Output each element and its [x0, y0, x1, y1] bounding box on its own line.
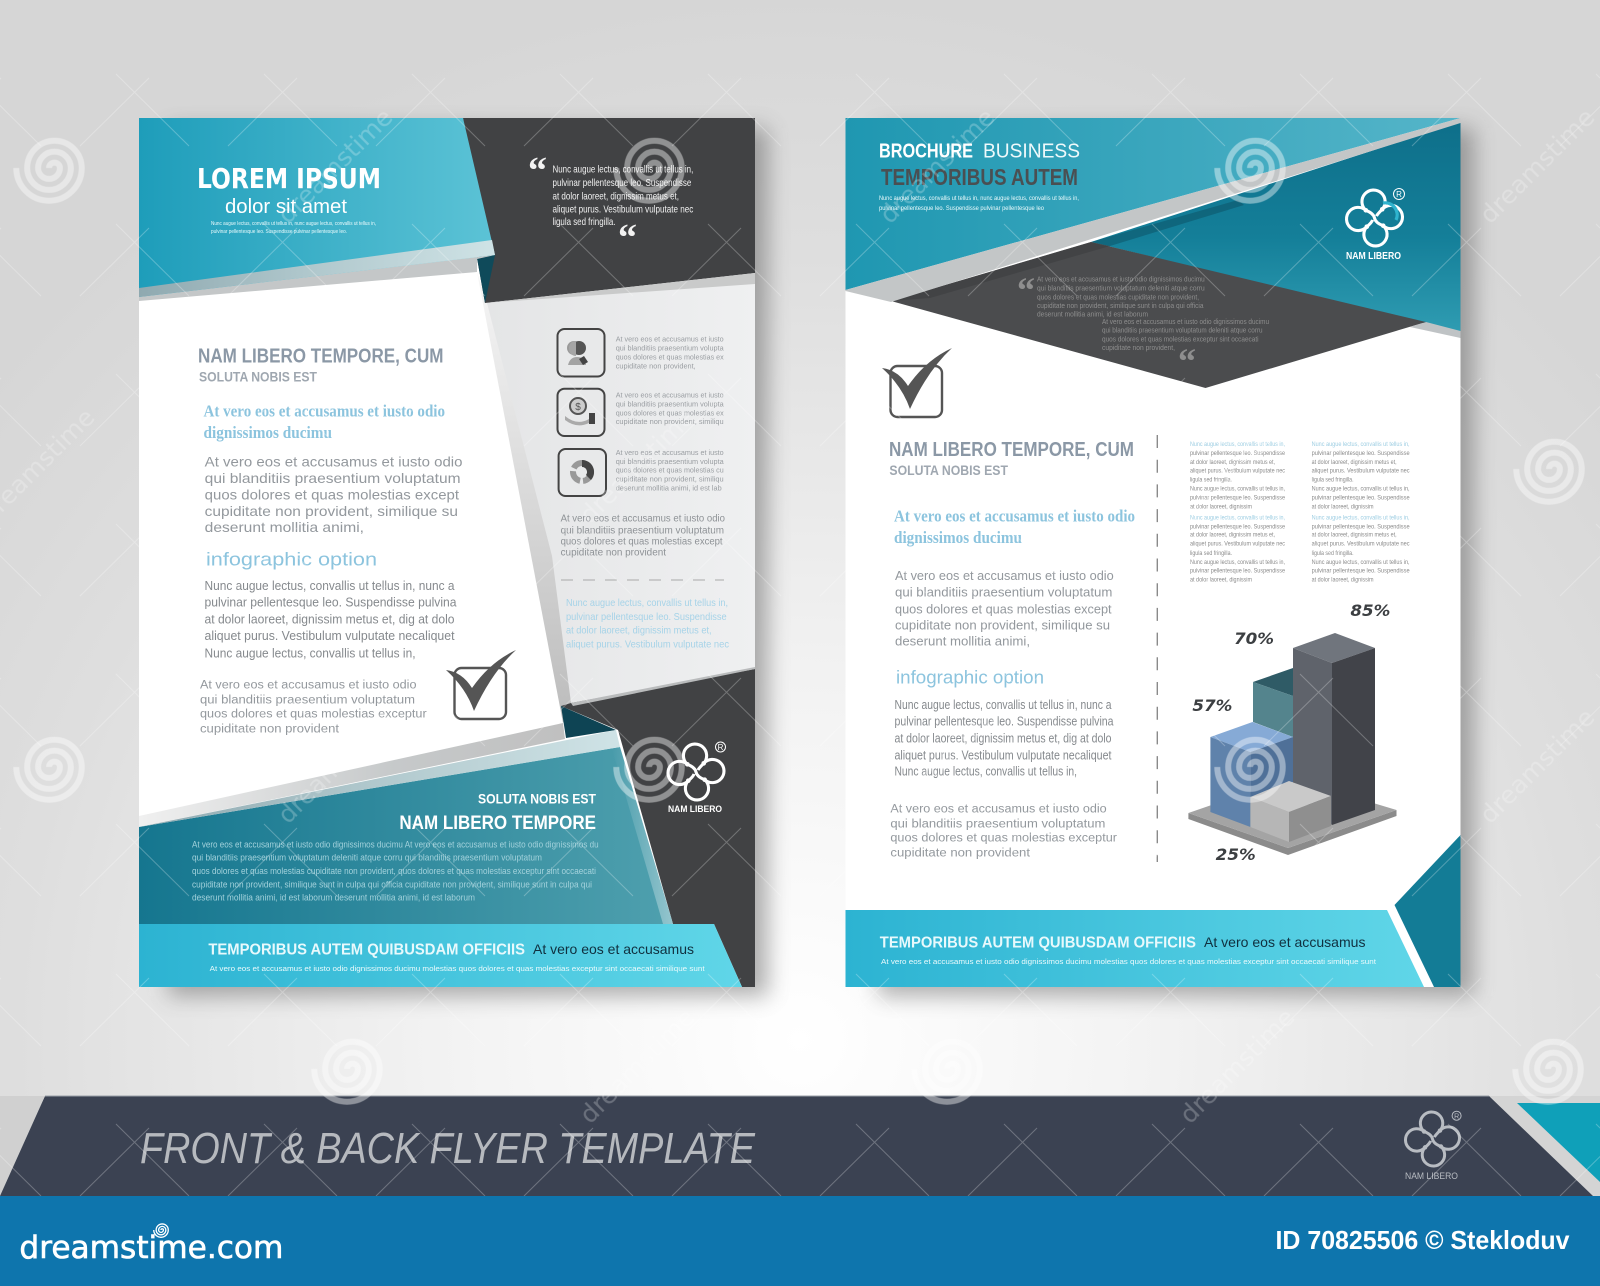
title — [879, 140, 1080, 190]
text column 2: ligula sed fringilla. — [1312, 550, 1354, 557]
text column 1: at dolor laoreet, dignissim — [1190, 503, 1252, 510]
text column 2: at dolor laoreet, dignissim metus et, — [1312, 532, 1397, 539]
panel: dark top block — [463, 118, 755, 303]
body text: deserunt mollitia animi, — [895, 634, 1030, 649]
body text 2: pulvinar pellentesque leo. Suspendisse pulvina — [204, 595, 457, 610]
panel: teal block — [139, 730, 673, 924]
body text 3: At vero eos et accusamus et iusto odio — [890, 804, 1107, 816]
chart labels: 70% — [1234, 629, 1274, 648]
blue column paragraph: aliquet purus. Vestibulum vulputate nec — [566, 639, 729, 650]
banner: bottom strip — [0, 1096, 1600, 1196]
quote block: qui blanditiis praesentium voluptatum deleniti atque corru — [1102, 326, 1263, 335]
text column 2: pulvinar pellentesque leo. Suspendisse — [1312, 494, 1410, 501]
icon: small spiral — [154, 1224, 168, 1237]
banner logo: R — [1454, 1114, 1459, 1120]
text column 1: Nunc augue lectus, convallis ut tellus in, — [1190, 514, 1285, 521]
blue serif heading: dignissimos ducimu — [204, 423, 332, 442]
panel: dark bottom block — [561, 669, 755, 987]
corner teal triangle — [1394, 835, 1460, 987]
icon: checkbox — [446, 650, 516, 719]
watermark text: dreamstime — [874, 703, 1000, 829]
body text: At vero eos et accusamus et iusto odio — [895, 568, 1114, 583]
heading: SOLUTA NOBIS EST — [199, 369, 317, 385]
quote block: At vero eos et accusamus et iusto odio dignissimos ducimu — [1102, 317, 1269, 326]
body text 2: pulvinar pellentesque leo. Suspendisse pulvina — [894, 715, 1114, 729]
text column 2: pulvinar pellentesque leo. Suspendisse — [1312, 450, 1410, 457]
text column 1: Nunc augue lectus, convallis ut tellus in, — [1190, 559, 1285, 566]
quote block: aliquet purus. Vestibulum vulputate nec — [552, 204, 693, 216]
icon descriptions: qui blanditiis praesentium volupta — [616, 344, 724, 353]
icon descriptions: At vero eos et accusamus et iusto — [616, 391, 724, 400]
text column 2: at dolor laoreet, dignissim — [1312, 577, 1374, 584]
panel: teal header — [139, 118, 495, 301]
watermark text: dreamstime — [272, 703, 398, 829]
body text 3: cupiditate non provident — [890, 848, 1031, 860]
panel: dark quote block — [891, 242, 1426, 388]
body text 2: Nunc augue lectus, convallis ut tellus in, — [204, 645, 416, 660]
watermark text: dreamstime — [1174, 403, 1300, 529]
panel: back flyer — [846, 118, 1460, 987]
quote block: “ — [1178, 341, 1196, 381]
body text — [205, 454, 463, 535]
text column 1 — [1190, 441, 1285, 584]
footer: blue bar — [0, 1196, 1600, 1286]
column paragraph: At vero eos et accusamus et iusto odio — [561, 514, 726, 525]
watermark spirals — [16, 141, 1582, 1102]
body text: qui blanditiis praesentium voluptatum — [895, 585, 1112, 600]
blue serif heading: At vero eos et accusamus et iusto odio — [894, 507, 1135, 526]
icon: people — [558, 329, 604, 376]
icon descriptions: deserunt mollitia animi, id est lab — [616, 484, 722, 493]
header small text: Nunc augue lectus, convallis ut tellus in, nunc augue lectus, convallis ut tellus in, — [879, 195, 1079, 202]
quote block: quos dolores et quas molestias cupiditate non provident, — [1037, 292, 1199, 301]
text column 1: pulvinar pellentesque leo. Suspendisse — [1190, 450, 1285, 457]
body text 3: cupiditate non provident — [200, 723, 340, 735]
panel: cyan footer: TEMPORIBUS AUTEM QUIBUSDAM OFFICIIS — [880, 934, 1196, 951]
banner title: FRONT & BACK FLYER TEMPLATE — [140, 1124, 756, 1173]
icon descriptions: cupiditate non provident, similiqu — [616, 475, 724, 484]
text column 2: pulvinar pellentesque leo. Suspendisse — [1312, 568, 1410, 575]
icon descriptions: cupiditate non provident, — [616, 361, 696, 370]
text column 2: at dolor laoreet, dignissim metus et, — [1312, 459, 1397, 466]
heading — [198, 346, 444, 385]
watermark text: dreamstime — [574, 403, 700, 529]
body text 2 — [894, 698, 1114, 779]
logo: R — [718, 743, 724, 752]
body text 3: quos dolores et quas molestias exceptur — [200, 709, 427, 721]
banner logo: NAM LIBERO — [1405, 1171, 1458, 1182]
panel: cyan footer: At vero eos et accusamus et iusto odio dignissimos ducimu molestias quos dolores et quas molestias exceptur sint occaecati similique sunt — [881, 957, 1377, 966]
text column 1: at dolor laoreet, dignissim metus et, — [1190, 459, 1275, 466]
header small text: pulvinar pellentesque leo. Suspendisse pulvinar pellentesque leo — [879, 205, 1044, 212]
blue serif heading: dignissimos ducimu — [894, 528, 1022, 547]
column paragraph: qui blanditiis praesentium voluptatum — [561, 525, 724, 536]
teal block text — [192, 839, 599, 904]
subheading: infographic option — [896, 667, 1044, 687]
blue column paragraph: Nunc augue lectus, convallis ut tellus in, — [566, 598, 728, 609]
panel: cyan footer: TEMPORIBUS AUTEM QUIBUSDAM OFFICIIS — [208, 941, 525, 958]
quote block: “ — [528, 150, 547, 192]
heading: NAM LIBERO TEMPORE, CUM — [198, 346, 444, 368]
body text 2: aliquet purus. Vestibulum vulputate necaliquet — [894, 748, 1112, 762]
panel: cyan footer — [846, 910, 1424, 987]
panel: cyan footer: At vero eos et accusamus — [1204, 934, 1366, 950]
heading: NAM LIBERO TEMPORE, CUM — [889, 439, 1134, 461]
quote block: Nunc augue lectus, convallis ut tellus in, — [552, 164, 693, 176]
title: TEMPORIBUS AUTEM — [881, 164, 1078, 190]
logo: NAM LIBERO — [1346, 251, 1401, 262]
body text 3 — [890, 804, 1117, 860]
body text 3: quos dolores et quas molestias exceptur — [890, 833, 1117, 845]
text column 2: ligula sed fringilla. — [1312, 477, 1354, 484]
subheading: infographic option — [206, 550, 377, 570]
body text: cupiditate non provident, similique su — [205, 503, 458, 519]
chart labels: 25% — [1216, 845, 1256, 864]
quote block: cupiditate non provident, — [1102, 343, 1175, 352]
text column 1: Nunc augue lectus, convallis ut tellus in, — [1190, 486, 1285, 493]
body text: quos dolores et quas molestias except — [205, 486, 459, 502]
body text 3: qui blanditiis praesentium voluptatum — [890, 818, 1105, 830]
quote block: At vero eos et accusamus et iusto odio dignissimos ducimu — [1037, 275, 1205, 284]
text column 1: aliquet purus. Vestibulum vulputate nec — [1190, 468, 1285, 475]
icon: checkbox — [882, 348, 952, 417]
image id: ID 70825506 © Stekloduv — [1276, 1225, 1570, 1255]
text column 2: at dolor laoreet, dignissim — [1312, 503, 1374, 510]
watermark text — [0, 103, 1600, 1129]
watermark text: dreamstime — [1174, 1003, 1300, 1129]
flyer shadows — [168, 128, 1474, 996]
text column 1: aliquet purus. Vestibulum vulputate nec — [1190, 541, 1285, 548]
bar: 57% — [1210, 722, 1293, 827]
watermark text: dreamstime — [874, 103, 1000, 229]
icon descriptions: qui blanditiis praesentium volupta — [616, 400, 724, 409]
blue column paragraph: pulvinar pellentesque leo. Suspendisse — [566, 612, 727, 623]
body text: At vero eos et accusamus et iusto odio — [205, 454, 463, 470]
icon: coin in hand: $ — [575, 402, 581, 413]
text column 2: Nunc augue lectus, convallis ut tellus in, — [1312, 486, 1410, 493]
chart labels — [1192, 601, 1390, 864]
quote block — [1017, 270, 1269, 381]
body text: qui blanditiis praesentium voluptatum — [205, 470, 461, 486]
text column 1: pulvinar pellentesque leo. Suspendisse — [1190, 523, 1285, 530]
column paragraph: quos dolores et quas molestias except — [561, 536, 723, 547]
teal block headings — [399, 791, 597, 834]
teal block text: cupiditate non provident, similique sunt in culpa qui officia cupiditate non provident, similique sunt in culpa qui — [192, 879, 592, 890]
teal block headings: NAM LIBERO TEMPORE — [399, 813, 596, 834]
panel: light grey column — [485, 283, 755, 703]
body text 3: qui blanditiis praesentium voluptatum — [200, 694, 415, 706]
body text 2: at dolor laoreet, dignissim metus et, dig at dolo — [204, 611, 454, 626]
bar: 70% — [1253, 668, 1293, 737]
icon descriptions: cupiditate non provident, similiqu — [616, 417, 724, 426]
text column 1: Nunc augue lectus, convallis ut tellus in, — [1190, 441, 1285, 448]
blue serif heading — [204, 402, 445, 442]
teal block text: qui blanditiis praesentium voluptatum deleniti atque corru qui blanditiis praesentium voluptatum — [192, 853, 542, 864]
text column 2: Nunc augue lectus, convallis ut tellus in, — [1312, 514, 1410, 521]
watermark text: dreamstime — [1474, 103, 1600, 229]
text column 1: ligula sed fringilla. — [1190, 550, 1232, 557]
body text 2: Nunc augue lectus, convallis ut tellus in, nunc a — [894, 698, 1112, 712]
teal block text: deserunt mollitia animi, id est laborum deserunt mollitia animi, id est laborum — [192, 893, 475, 904]
text column 1: at dolor laoreet, dignissim — [1190, 577, 1252, 584]
logo — [1346, 188, 1404, 262]
title: BUSINESS — [983, 140, 1080, 162]
panel: teal header — [846, 118, 1460, 290]
subtitle: dolor sit amet — [225, 196, 347, 218]
icon descriptions: quos dolores et quas molestias cu — [616, 466, 724, 475]
body text 2 — [204, 578, 457, 660]
logo: R — [1396, 190, 1402, 199]
quote block: ligula sed fringilla. — [552, 216, 616, 228]
quote block: cupiditate non provident, similique sunt in culpa qui officia — [1037, 301, 1204, 310]
site name: dreamstime.com — [19, 1230, 283, 1266]
header small text — [211, 221, 376, 235]
body text 2: Nunc augue lectus, convallis ut tellus in, — [894, 765, 1077, 779]
icon descriptions — [616, 335, 724, 493]
quote block: qui blanditiis praesentium voluptatum deleniti atque corru — [1037, 284, 1205, 293]
text column 1: at dolor laoreet, dignissim metus et, — [1190, 532, 1275, 539]
icon: coin in hand — [558, 389, 604, 436]
quote block: deserunt mollitia animi, id est laborum — [1037, 310, 1148, 319]
teal block text: At vero eos et accusamus et iusto odio dignissimos ducimu At vero eos et accusamus et iusto odio dignissimos du — [192, 839, 599, 850]
teal block headings: SOLUTA NOBIS EST — [478, 791, 597, 806]
body text: quos dolores et quas molestias except — [895, 601, 1112, 616]
teal block text: quos dolores et quas molestias cupiditate non provident, quos dolores et quas molestias exceptur sint occaecati — [192, 866, 596, 877]
blue column paragraph: at dolor laoreet, dignissim metus et, — [566, 625, 712, 636]
text column 2: Nunc augue lectus, convallis ut tellus in, — [1312, 559, 1410, 566]
body text 3: At vero eos et accusamus et iusto odio — [200, 679, 416, 691]
bar: 25% — [1250, 781, 1331, 842]
panel: front flyer — [139, 118, 755, 987]
body text 3 — [200, 679, 427, 735]
body text: deserunt mollitia animi, — [205, 519, 364, 535]
icon descriptions: At vero eos et accusamus et iusto — [616, 448, 724, 457]
icon descriptions: qui blanditiis praesentium volupta — [616, 457, 724, 466]
quote block: “ — [1017, 270, 1035, 310]
column paragraph — [561, 514, 726, 559]
logo — [668, 742, 726, 815]
icon: donut chart — [559, 449, 606, 496]
heading: SOLUTA NOBIS EST — [889, 462, 1008, 478]
header small text: pulvinar pellentesque leo. Suspendisse pulvinar pellentesque leo. — [211, 229, 347, 235]
watermark text: dreamstime — [272, 103, 398, 229]
blue column paragraph — [566, 598, 729, 650]
watermark text: dreamstime — [1474, 703, 1600, 829]
header small text: Nunc augue lectus, convallis ut tellus in, nunc augue lectus, convallis ut tellus in, — [211, 221, 376, 227]
body text 2: Nunc augue lectus, convallis ut tellus in, nunc a — [204, 578, 455, 593]
text column 2 — [1312, 441, 1410, 584]
logo: NAM LIBERO — [668, 804, 722, 815]
grey diagonal strip — [846, 118, 1460, 302]
icon descriptions: quos dolores et quas molestias ex — [616, 352, 724, 361]
panel: cyan footer: At vero eos et accusamus — [533, 941, 694, 957]
panel: teal right block — [1091, 122, 1460, 332]
body text — [895, 568, 1114, 649]
heading — [889, 439, 1134, 478]
panel: cyan footer: At vero eos et accusamus et iusto odio dignissimos ducimu molestias quos dolores et quas molestias exceptur sint occaecati similique sunt — [210, 964, 706, 973]
body text: cupiditate non provident, similique su — [895, 617, 1110, 632]
title: lorem ipsum: LOREM IPSUM — [197, 162, 381, 195]
column paragraph: cupiditate non provident — [561, 548, 666, 559]
header small text — [879, 195, 1079, 212]
title: BROCHURE — [879, 140, 973, 162]
blue serif heading: At vero eos et accusamus et iusto odio — [204, 402, 445, 421]
chart labels: 85% — [1350, 601, 1390, 620]
text column 1: ligula sed fringilla. — [1190, 477, 1232, 484]
blue serif heading — [894, 507, 1135, 547]
quote block: quos dolores et quas molestias exceptur sint occaecati — [1102, 334, 1259, 343]
text column 1: pulvinar pellentesque leo. Suspendisse — [1190, 494, 1285, 501]
grey strip above teal block — [139, 723, 565, 827]
body text 2: at dolor laoreet, dignissim metus et, dig at dolo — [894, 731, 1112, 745]
watermark text: dreamstime — [574, 1003, 700, 1129]
quote block — [528, 150, 693, 259]
chart labels: 57% — [1192, 696, 1232, 715]
quote block: pulvinar pellentesque leo. Suspendisse — [552, 177, 691, 189]
chart base — [1188, 778, 1396, 855]
chart: 3D bars — [1188, 601, 1396, 864]
quote block: “ — [618, 217, 637, 259]
body text 2: aliquet purus. Vestibulum vulputate necaliquet — [204, 628, 455, 643]
quote block: at dolor laoreet, dignissim metus et, — [552, 190, 679, 202]
banner logo — [1405, 1111, 1461, 1182]
icon descriptions: At vero eos et accusamus et iusto — [616, 335, 724, 344]
text column 1: pulvinar pellentesque leo. Suspendisse — [1190, 568, 1285, 575]
text column 2: Nunc augue lectus, convallis ut tellus in, — [1312, 441, 1410, 448]
panel: cyan footer — [139, 924, 742, 987]
text column 2: aliquet purus. Vestibulum vulputate nec — [1312, 468, 1410, 475]
text column 2: aliquet purus. Vestibulum vulputate nec — [1312, 541, 1410, 548]
bar: 85% — [1293, 633, 1375, 825]
icon descriptions: quos dolores et quas molestias ex — [616, 408, 724, 417]
text column 2: pulvinar pellentesque leo. Suspendisse — [1312, 523, 1410, 530]
